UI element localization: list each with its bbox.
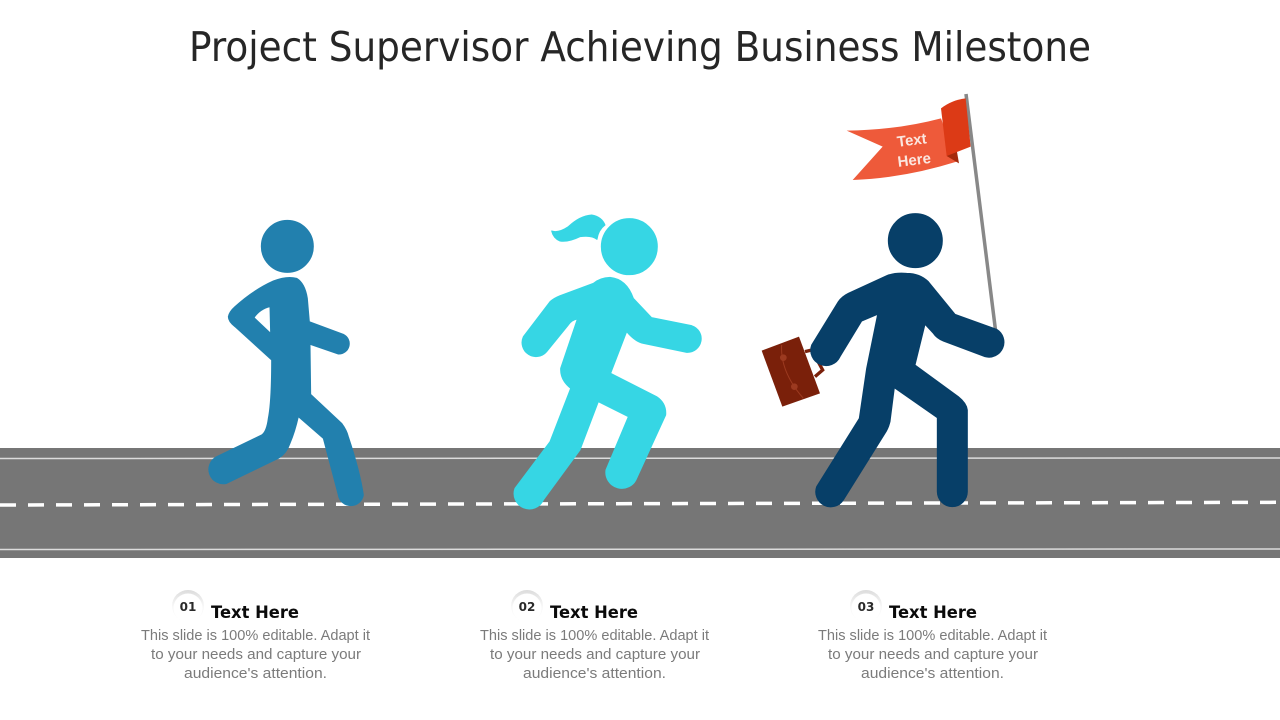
number badge 1: 01	[180, 600, 196, 614]
item 1: Text Here	[211, 603, 299, 623]
title: Project Supervisor Achieving Business Milestone	[189, 23, 1091, 71]
number badge 2	[511, 590, 543, 622]
figure: ponytail runner	[514, 215, 701, 509]
item 2: to your needs and capture your	[490, 647, 700, 663]
item 1: to your needs and capture your	[151, 647, 361, 663]
item 2: Text Here	[550, 603, 638, 623]
flag label	[894, 130, 932, 171]
number badge 3	[850, 590, 882, 622]
flag pole	[966, 94, 996, 330]
item 3: audience's attention.	[861, 666, 1004, 682]
item 1	[141, 590, 370, 682]
road	[0, 448, 1280, 558]
item 1: This slide is 100% editable. Adapt it	[141, 628, 370, 644]
item 3: This slide is 100% editable. Adapt it	[818, 628, 1047, 644]
item 3: Text Here	[889, 603, 977, 623]
flag	[847, 98, 971, 180]
item 1: audience's attention.	[184, 666, 327, 682]
number badge 3: 03	[858, 600, 874, 614]
item 2	[480, 590, 709, 682]
item 3	[818, 590, 1047, 682]
figure: supervisor	[811, 214, 1004, 507]
icon: ponytail	[552, 215, 605, 241]
flag label: Text	[896, 130, 928, 151]
item 2: This slide is 100% editable. Adapt it	[480, 628, 709, 644]
number badge 1	[172, 590, 204, 622]
figure: blue runner	[209, 220, 363, 506]
icon: briefcase	[762, 337, 823, 407]
flag label: Here	[897, 150, 932, 171]
item 3: to your needs and capture your	[828, 647, 1038, 663]
number badge 2: 02	[519, 600, 535, 614]
item 2: audience's attention.	[523, 666, 666, 682]
